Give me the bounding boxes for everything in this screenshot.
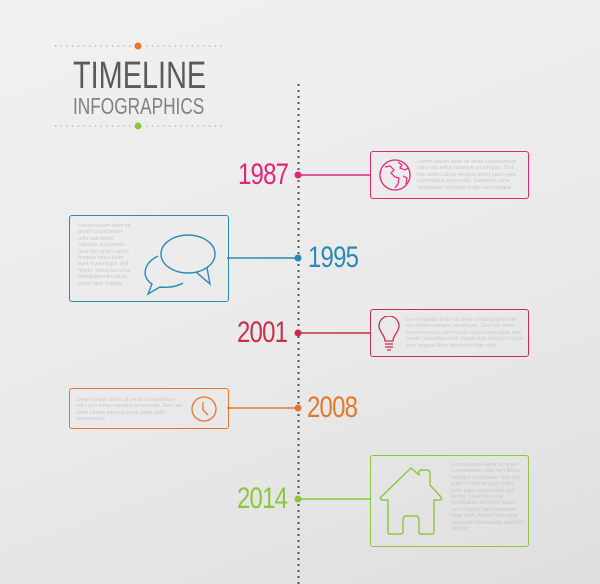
title [55,42,222,130]
event: 2008: Lorem ipsum dolor sit amet consectetuer odio non tellus natoque accumsan. Sed hac enim Lorem tempus tortor justo eget scelerisque. [76,397,183,422]
event: 2014: 2014 [237,482,287,515]
event: 2008 [69,388,357,429]
title: TIMELINE [73,55,206,97]
event: 1995: Lorem ipsum dolor sit amet consectetuer odio non tellus natoque accumsan. Sed hac enim Lorem tempus tortor justo eget scelerisque sed morbi. Senectus urna Vestibulum tincidunt turpis sem magna [78,223,131,287]
timeline axis [298,84,300,584]
event: 1995: 1995 [308,241,358,274]
event: 2001 [237,309,529,357]
event: 2014: Lorem ipsum dolor sit amet consectetuer odio non tellus natoque accumsan. Sed hac enim Lorem tempus tortor justo eget scelerisque sed morbi. Senectus urna Vestibulum tincidunt turpis sem magna Nam hendrerit vitae nibh. Auctor Sed urna dignissim malesuada eleifend ultrices [451,462,523,532]
event: 2008: 2008 [307,391,357,424]
title: INFOGRAPHICS [73,93,204,119]
event: 2001: Lorem ipsum dolor sit amet consectetuer odio non tellus natoque accumsan. Sed hac enim Lorem tempus tortor justo eget scelerisque sed morbi. Senectus urna Vestibulum tincidunt turpis sem magna Nam hendrerit vitae nibh. [406,317,524,349]
event: 1987 [238,151,529,199]
event: 2014 [237,455,529,547]
event: 1995 [69,215,358,302]
event: 1987: Lorem ipsum dolor sit amet consectetuer odio non tellus natoque accumsan. Sed hac enim Lorem tempus tortor justo eget scelerisque sed morbi. Senectus urna Vestibulum tincidunt turpis sem magna [417,159,516,191]
event: 2001: 2001 [237,316,287,349]
event: 1987: 1987 [238,158,288,191]
